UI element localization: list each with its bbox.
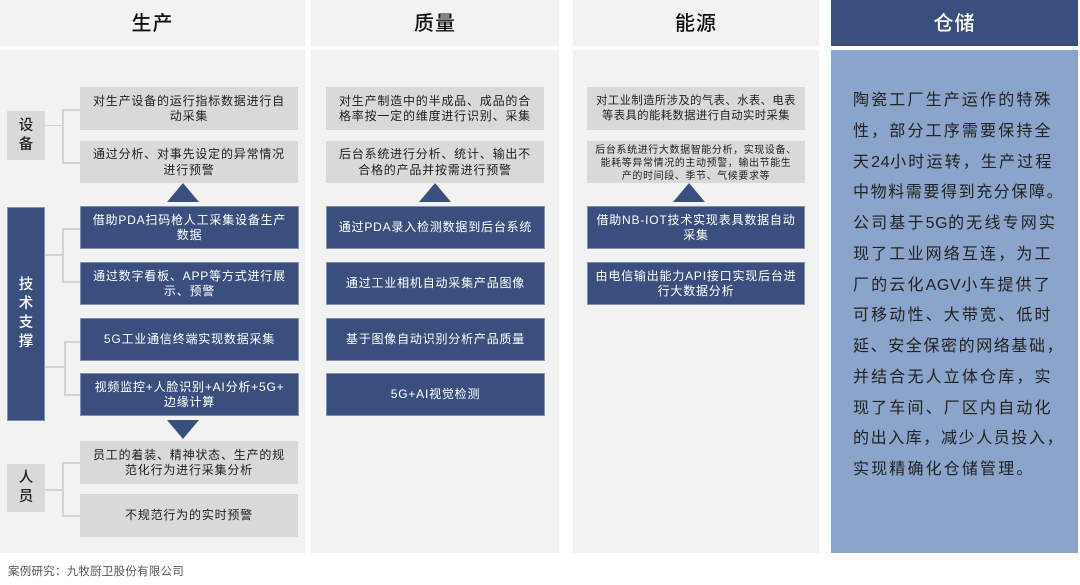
panel: 能源 bbox=[573, 50, 819, 553]
box: 能耗采集: 对工业制造所涉及的气表、水表、电表 bbox=[596, 95, 796, 107]
box: 能耗采集: 等表具的能耗数据进行自动实时采集 bbox=[602, 110, 790, 122]
box: 能耗采集 bbox=[587, 87, 805, 130]
box: 设备数据采集: 对生产设备的运行指标数据进行自 bbox=[93, 94, 285, 108]
header: 仓储: 仓储 bbox=[934, 13, 976, 35]
box: 视频监控: 边缘计算 bbox=[164, 395, 215, 409]
box: 数字看板: 通过数字看板、APP等方式进行展 bbox=[93, 269, 286, 283]
box: 员工行为采集: 范化行为进行采集分析 bbox=[125, 463, 253, 477]
box: 半成品识别: 格率按一定的维度进行识别、采集 bbox=[339, 109, 531, 123]
label: 人员: 人 bbox=[19, 470, 33, 486]
box: 图像识别: 基于图像自动识别分析产品质量 bbox=[346, 332, 525, 346]
box: 视觉检测: 5G+AI视觉检测 bbox=[391, 387, 480, 401]
text: 仓储说明: 可移动性、大带宽、低时 bbox=[853, 307, 1053, 324]
box: 视频监控: 视频监控+人脸识别+AI分析+5G+ bbox=[95, 380, 284, 394]
box: 视觉检测 bbox=[326, 373, 545, 416]
box: API接口: 行大数据分析 bbox=[658, 284, 734, 298]
text: 仓储说明: 实现精确化仓储管理。 bbox=[853, 461, 1035, 478]
text: 仓储说明: 厂的云化AGV小车提供了 bbox=[853, 276, 1052, 294]
text: 仓储说明: 天24小时运转，生产过程 bbox=[853, 154, 1054, 170]
text: 仓储说明: 的出入库，减少人员投入， bbox=[853, 430, 1064, 447]
text: 仓储说明: 延、安全保密的网络基础， bbox=[853, 338, 1064, 355]
box: 实时预警: 不规范行为的实时预警 bbox=[125, 508, 253, 522]
text: 仓储说明: 性，部分工序需要保持全 bbox=[853, 123, 1053, 140]
header: 生产 bbox=[0, 0, 305, 46]
text: 仓储说明: 并结合无人立体仓库，实 bbox=[853, 369, 1053, 386]
arrow: up bbox=[673, 183, 705, 202]
label: 技术支撑: 支 bbox=[19, 315, 33, 331]
box: 半成品识别 bbox=[326, 87, 544, 130]
arrow: up bbox=[167, 183, 199, 202]
label: 设备 bbox=[7, 111, 45, 160]
text: 仓储说明 bbox=[853, 91, 1064, 478]
box: 智能分析 bbox=[587, 141, 805, 183]
box: 智能分析: 后台系统进行大数据智能分析，实现设备、 bbox=[595, 144, 797, 156]
box: 数字看板: 示、预警 bbox=[164, 284, 215, 298]
box: 设备预警 bbox=[80, 141, 298, 183]
panel: 仓储 bbox=[831, 50, 1078, 553]
box: PDA采集: 借助PDA扫码枪人工采集设备生产 bbox=[93, 213, 286, 227]
header: 生产: 生产 bbox=[132, 13, 174, 35]
box: 数字看板 bbox=[80, 262, 299, 305]
label: 技术支撑: 撑 bbox=[19, 334, 33, 350]
arrow: up bbox=[419, 183, 451, 202]
panel: 质量 bbox=[311, 50, 559, 553]
box: 设备数据采集: 动采集 bbox=[170, 109, 208, 123]
box: NB-IOT: 借助NB-IOT技术实现表具数据自动 bbox=[596, 213, 796, 227]
box: 设备预警: 通过分析、对事先设定的异常情况 bbox=[93, 147, 285, 161]
header: 仓储 bbox=[831, 0, 1078, 46]
panel: 生产 bbox=[0, 50, 305, 553]
box: 工业相机: 通过工业相机自动采集产品图像 bbox=[346, 276, 525, 290]
box: PDA采集: 数据 bbox=[177, 228, 202, 242]
box: 5G终端: 5G工业通信终端实现数据采集 bbox=[104, 332, 275, 346]
box: PDA采集 bbox=[80, 206, 299, 249]
box: 视频监控 bbox=[80, 373, 299, 416]
box: API接口: 由电信输出能力API接口实现后台进 bbox=[596, 269, 796, 283]
box: NB-IOT bbox=[587, 206, 805, 249]
label: 人员: 员 bbox=[19, 489, 33, 505]
text: 仓储说明: 中物料需要得到充分保障。 bbox=[853, 184, 1064, 201]
label: 人员 bbox=[7, 464, 45, 512]
header: 能源 bbox=[573, 0, 819, 46]
text: 仓储说明: 现了工业网络互连，为工 bbox=[853, 246, 1053, 263]
box: 智能分析: 能耗等异常情况的主动预警，输出节能生 bbox=[601, 158, 791, 168]
box: 设备数据采集 bbox=[80, 87, 298, 130]
label: 设备: 设 bbox=[19, 118, 33, 134]
box: 实时预警 bbox=[80, 494, 298, 537]
box: API接口 bbox=[587, 262, 805, 305]
box: 5G终端 bbox=[80, 318, 299, 361]
arrow: down bbox=[167, 420, 199, 439]
source note: 案例研究：九牧厨卫股份有限公司 bbox=[8, 566, 184, 578]
text: 仓储说明: 现了车间、厂区内自动化 bbox=[853, 400, 1053, 416]
header: 质量 bbox=[311, 0, 559, 46]
label: 技术支撑: 技 bbox=[19, 277, 33, 293]
box: 智能分析: 产的时间段、季节、气候要求等 bbox=[622, 170, 770, 182]
box: PDA录入 bbox=[326, 206, 545, 249]
label: 技术支撑 bbox=[7, 207, 45, 421]
box: PDA录入: 通过PDA录入检测数据到后台系统 bbox=[339, 220, 532, 234]
box: 后台分析: 后台系统进行分析、统计、输出不 bbox=[339, 147, 531, 161]
label: 技术支撑: 术 bbox=[19, 296, 33, 312]
label: 设备: 备 bbox=[19, 136, 33, 152]
box: 设备预警: 进行预警 bbox=[163, 162, 215, 176]
box: 工业相机 bbox=[326, 262, 545, 305]
box: 半成品识别: 对生产制造中的半成品、成品的合 bbox=[339, 94, 531, 108]
text: 仓储说明: 陶瓷工厂生产运作的特殊 bbox=[853, 92, 1053, 109]
box: NB-IOT: 采集 bbox=[683, 228, 709, 242]
box: 后台分析: 合格的产品并按需进行预警 bbox=[358, 162, 512, 176]
box: 员工行为采集: 员工的着装、精神状态、生产的规 bbox=[93, 448, 285, 462]
box: 员工行为采集 bbox=[80, 441, 298, 484]
text: 仓储说明: 公司基于5G的无线专网实 bbox=[853, 215, 1057, 232]
box: 图像识别 bbox=[326, 318, 545, 361]
box: 后台分析 bbox=[326, 141, 544, 183]
header: 能源: 能源 bbox=[675, 13, 717, 35]
header: 质量: 质量 bbox=[414, 13, 456, 35]
